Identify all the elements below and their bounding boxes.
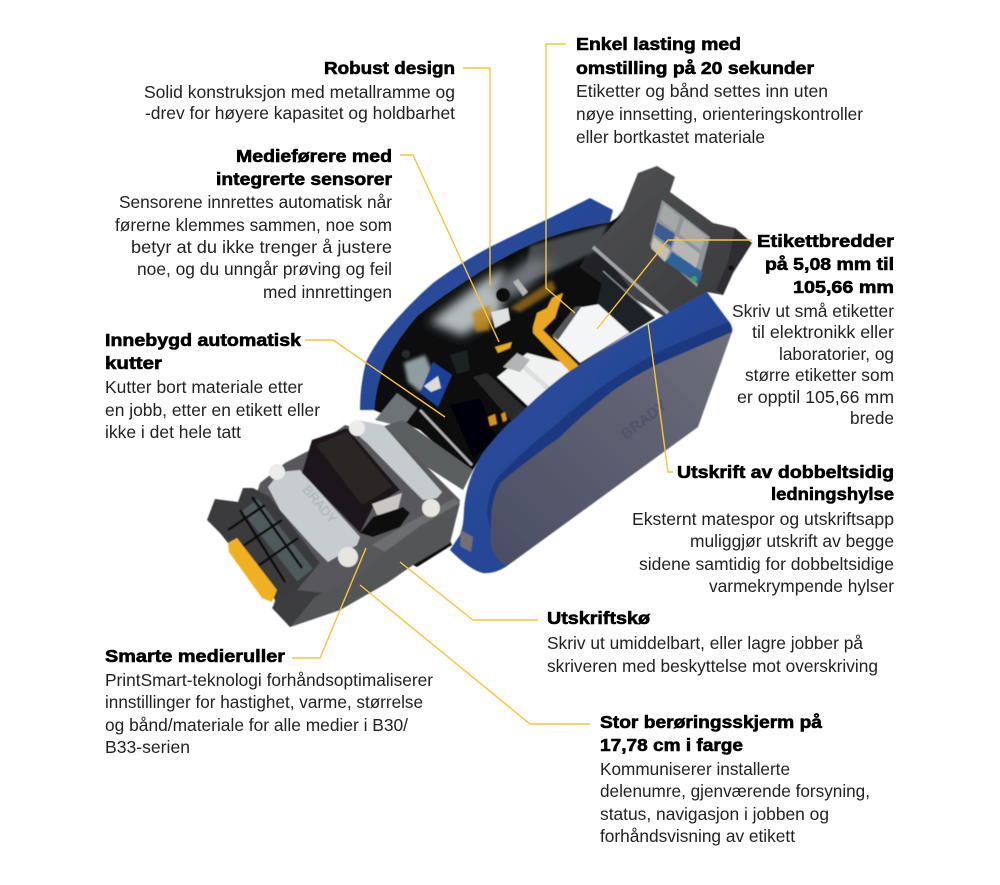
callout: Innebygd automatisk kutter: Kutter bort materiale etter — [105, 377, 303, 397]
callout: Enkel lasting: Enkel lasting med — [576, 34, 741, 54]
callout: Medieførere: førerne klemmes sammen, noe som — [115, 215, 392, 235]
callout: Enkel lasting: nøye innsetting, orienteringskontroller — [576, 104, 863, 124]
rear guide rods — [593, 247, 668, 333]
callout: Etikettbredder: på 5,08 mm til — [765, 254, 894, 274]
leader lines — [292, 44, 752, 724]
yellow handle — [228, 538, 277, 602]
wall fittings — [420, 362, 452, 407]
callout: Stor berøringsskjerm: Kommuniserer installerte — [600, 759, 790, 779]
callout: Innebygd automatisk kutter: en jobb, etter en etikett eller — [105, 400, 320, 420]
circuit board — [450, 398, 497, 458]
callout: Stor berøringsskjerm: status, navigasjon i jobben og — [600, 804, 829, 824]
back shell blue band — [360, 198, 613, 410]
yellow media guide — [533, 293, 580, 372]
callout: Smarte medieruller: Smarte medieruller — [105, 646, 285, 666]
callout: Etikettbredder: til elektronikk eller — [752, 322, 894, 342]
callout: Robust design — [144, 58, 455, 123]
callout: Stor berøringsskjerm: forhåndsvisning av etikett — [600, 826, 795, 846]
callout: Enkel lasting: eller bortkastet materiale — [576, 127, 765, 147]
callout: Smarte medieruller: innstillinger for hastighet, varme, størrelse — [105, 692, 423, 712]
upper wall highlights — [525, 224, 608, 282]
callout: Etikettbredder: laboratorier, og — [779, 344, 894, 364]
right ribbon roll — [350, 420, 442, 500]
callout: Stor berøringsskjerm: delenumre, gjenværende forsyning, — [600, 781, 870, 801]
back tray with sticker — [580, 166, 752, 318]
callout: Etikettbredder: er opptil 105,66 mm — [737, 387, 894, 407]
callout: Etikettbredder: Skriv ut små etiketter — [732, 301, 894, 321]
callout: Utskrift av dobbeltsidig ledningshylse: sidene samtidig for dobbeltsidige — [639, 554, 894, 574]
callout: Medieførere: med innrettingen — [263, 282, 392, 302]
callout: Etikettbredder — [732, 231, 894, 428]
callout: Stor berøringsskjerm — [600, 712, 870, 846]
callout: Innebygd automatisk kutter: ikke i det hele tatt — [105, 422, 241, 442]
callout: Utskrift av dobbeltsidig ledningshylse: Eksternt matespor og utskriftsapp — [632, 509, 894, 529]
media roll — [553, 304, 630, 363]
dark roller and cube — [473, 373, 527, 423]
callout: Medieførere: Sensorene innrettes automatisk når — [119, 192, 392, 212]
grill — [207, 488, 320, 602]
callout: Smarte medieruller — [105, 646, 433, 757]
left ribbon roll — [268, 470, 360, 562]
callout: Innebygd automatisk kutter: kutter — [105, 353, 162, 373]
callout: Stor berøringsskjerm: Stor berøringsskjerm på — [600, 712, 822, 732]
callout: Utskrift av dobbeltsidig ledningshylse: varmekrympende hylser — [709, 576, 894, 596]
callout: Utskrift av dobbeltsidig ledningshylse: muliggjør utskrift av begge — [690, 531, 894, 551]
callout: Innebygd automatisk kutter — [105, 330, 320, 442]
grey roller and slab — [375, 393, 417, 427]
callout: Smarte medieruller: PrintSmart-teknologi forhåndsoptimaliserer — [105, 670, 433, 690]
front shell — [450, 292, 732, 573]
callout: Utskriftskø: Utskriftskø — [547, 608, 650, 628]
callout: Stor berøringsskjerm: 17,78 cm i farge — [600, 735, 743, 755]
callout: Robust design: Robust design — [324, 58, 455, 78]
embossed logo: BRADY — [618, 397, 670, 443]
callout: Enkel lasting: Etiketter og bånd settes inn uten — [576, 81, 828, 101]
drawer tray — [207, 420, 460, 627]
callout: Utskrift av dobbeltsidig ledningshylse: Utskrift av dobbeltsidig — [677, 462, 894, 482]
callout: Etikettbredder: 105,66 mm — [793, 277, 894, 297]
callout: Etikettbredder: større etiketter som — [745, 365, 894, 385]
ribbon cartridge — [302, 428, 400, 533]
callout: Enkel lasting — [576, 34, 863, 147]
callout: Etikettbredder: brede — [850, 408, 894, 428]
callout: Etikettbredder: Etikettbredder — [757, 231, 894, 251]
printer interior — [372, 215, 650, 490]
callout: Utskriftskø: Skriv ut umiddelbart, eller lagre jobber på — [547, 633, 863, 653]
callout: Smarte medieruller: og bånd/materiale for alle medier i B30/ — [105, 715, 408, 735]
instruction sticker — [650, 200, 710, 287]
callout: Utskrift av dobbeltsidig ledningshylse — [632, 462, 894, 596]
callout: Medieførere: integrerte sensorer — [216, 169, 392, 189]
white caps — [269, 464, 285, 480]
printer illustration — [207, 166, 752, 627]
callout: Utskriftskø — [547, 608, 878, 676]
callout: Robust design: Solid konstruksjon med metallramme og — [144, 82, 455, 102]
end block — [272, 590, 323, 627]
callout: Innebygd automatisk kutter: Innebygd automatisk — [105, 330, 301, 350]
callout: Smarte medieruller: B33-serien — [105, 737, 190, 757]
callout: Utskriftskø: skriveren med beskyttelse mot overskriving — [547, 656, 878, 676]
callout: Enkel lasting: omstilling på 20 sekunder — [576, 58, 814, 78]
callout: Utskrift av dobbeltsidig ledningshylse: ledningshylse — [771, 484, 894, 504]
callout: Robust design: -drev for høyere kapasitet og holdbarhet — [145, 103, 455, 123]
callout: Medieførere: betyr at du ikke trenger å justere — [131, 237, 392, 257]
callout: Medieførere: noe, og du unngår prøving og feil — [137, 259, 392, 279]
callout: Medieførere — [115, 146, 392, 302]
callout: Medieførere: Medieførere med — [236, 146, 392, 166]
drawer tray: BRADY — [300, 482, 340, 526]
